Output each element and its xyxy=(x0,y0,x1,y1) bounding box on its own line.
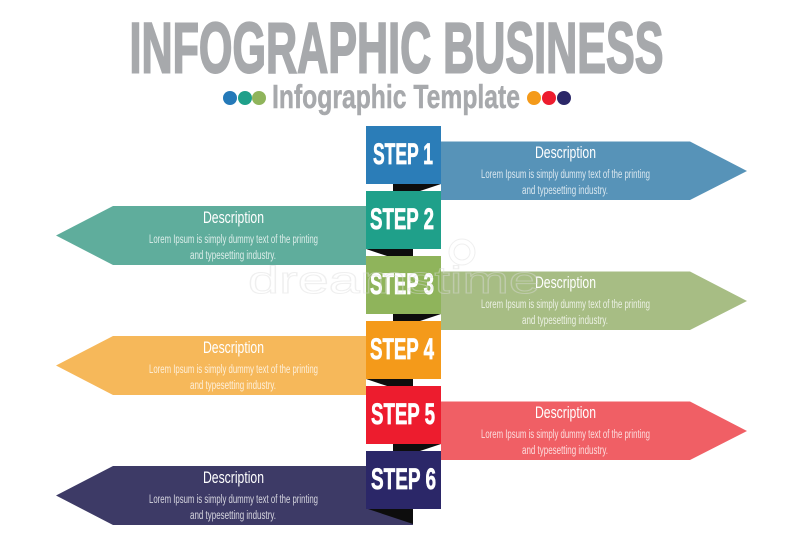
right colour dots xyxy=(527,91,571,105)
arrow 3: description: and typesetting industry. xyxy=(522,315,608,327)
arrow 4: description: and typesetting industry. xyxy=(190,380,276,392)
arrow 1: description: Lorem Ipsum is simply dummy text of the printing xyxy=(481,169,650,181)
watermark: dreamstime xyxy=(248,260,540,302)
subtitle: Infographic Template xyxy=(272,78,520,115)
black connector folds xyxy=(366,184,441,524)
arrow 6: description: Description xyxy=(203,468,264,487)
arrow 3: description xyxy=(441,272,747,330)
arrow 4: description: Lorem Ipsum is simply dummy text of the printing xyxy=(149,364,318,376)
arrow 5: description: Description xyxy=(535,403,596,422)
step 2 block: STEP 2 xyxy=(370,203,434,236)
arrow 2: description: Description xyxy=(203,208,264,227)
arrow 6: description: Lorem Ipsum is simply dummy text of the printing xyxy=(149,494,318,506)
arrow 2: description: Lorem Ipsum is simply dummy text of the printing xyxy=(149,234,318,246)
step 4 block xyxy=(366,321,441,379)
arrow 6: description xyxy=(56,466,413,525)
watermark xyxy=(248,239,540,302)
step 6 block: STEP 6 xyxy=(371,463,436,496)
arrow 1: description: and typesetting industry. xyxy=(522,185,608,197)
arrow 5: description xyxy=(441,402,747,460)
arrow 4: description: Description xyxy=(203,338,264,357)
step 3 block xyxy=(366,256,441,314)
left colour dots xyxy=(223,91,266,105)
step 1 block: STEP 1 xyxy=(373,138,433,171)
step 4 block: STEP 4 xyxy=(370,333,434,366)
step 1 block xyxy=(366,126,441,184)
step 3 block: STEP 3 xyxy=(370,268,434,301)
arrow 2: description xyxy=(56,206,366,265)
arrow 3: description: Lorem Ipsum is simply dummy text of the printing xyxy=(481,299,650,311)
step 2 block xyxy=(366,191,441,249)
arrow 5: description: and typesetting industry. xyxy=(522,445,608,457)
step 5 block: STEP 5 xyxy=(371,398,435,431)
arrow 3: description: Description xyxy=(535,273,596,292)
arrow 6: description: and typesetting industry. xyxy=(190,510,276,522)
arrow 1: description xyxy=(441,142,747,200)
arrow 4: description xyxy=(56,336,366,395)
arrow 2: description: and typesetting industry. xyxy=(190,250,276,262)
arrow 5: description: Lorem Ipsum is simply dummy text of the printing xyxy=(481,429,650,441)
arrow 1: description: Description xyxy=(535,143,596,162)
step 5 block xyxy=(366,386,441,444)
step 6 block xyxy=(366,451,441,509)
